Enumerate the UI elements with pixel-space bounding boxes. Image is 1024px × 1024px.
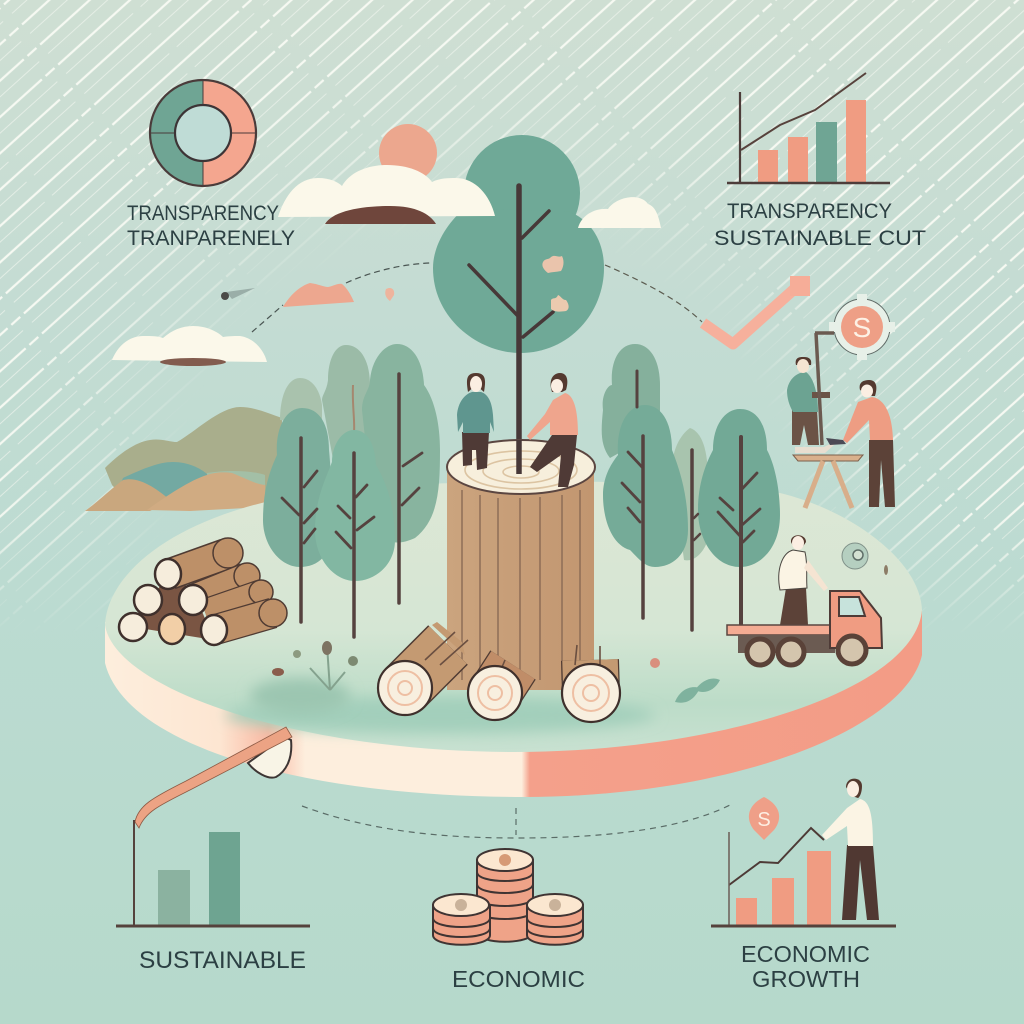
top right chart <box>727 73 890 183</box>
background <box>0 0 1024 616</box>
leaf plant right <box>650 658 720 703</box>
coin token on platform <box>842 543 888 575</box>
trees left <box>263 344 440 637</box>
economic growth chart <box>711 797 896 926</box>
dashed connector <box>302 805 730 838</box>
platform <box>105 481 922 797</box>
icon: right cloud <box>578 197 661 228</box>
heading: transparency left: TRANPARENELY <box>127 227 295 250</box>
icon: coin stacks <box>433 849 583 945</box>
clouds and markers: left <box>112 263 430 366</box>
icon: large cloud <box>278 165 495 224</box>
icon: sun <box>379 124 437 182</box>
label: economic growth: ECONOMIC <box>741 941 870 967</box>
person: growth <box>822 779 879 920</box>
worker salmon <box>826 380 895 507</box>
heading: transparency left <box>127 202 295 250</box>
icon: donut chart <box>150 80 256 186</box>
heading: transparency left: TRANSPARENCY <box>127 202 279 225</box>
worker at table <box>787 333 834 445</box>
heading: transparency right: TRANSPARENCY <box>727 200 892 223</box>
hills <box>85 407 282 511</box>
log pile <box>119 538 287 645</box>
label: economic growth <box>741 941 870 992</box>
label: economic: ECONOMIC <box>452 966 585 992</box>
economic growth chart: S <box>757 809 771 831</box>
person: left on stump <box>457 373 494 470</box>
work table <box>793 438 863 508</box>
axe and sustainable chart <box>116 727 310 926</box>
gear with dollar <box>829 294 895 360</box>
heading: transparency right: SUSTAINABLE CUT <box>714 227 926 250</box>
tree stump <box>447 440 595 690</box>
person: right on stump <box>527 373 578 487</box>
label: economic growth: GROWTH <box>752 966 860 992</box>
label: sustainable: SUSTAINABLE <box>139 947 306 974</box>
front logs <box>378 622 620 722</box>
trend arrow <box>605 265 810 344</box>
sprout <box>272 641 358 690</box>
trees right <box>602 344 780 630</box>
gear with dollar: S <box>853 312 871 343</box>
heading: transparency right <box>714 200 926 250</box>
big tree <box>433 135 604 473</box>
truck with worker <box>727 535 882 665</box>
